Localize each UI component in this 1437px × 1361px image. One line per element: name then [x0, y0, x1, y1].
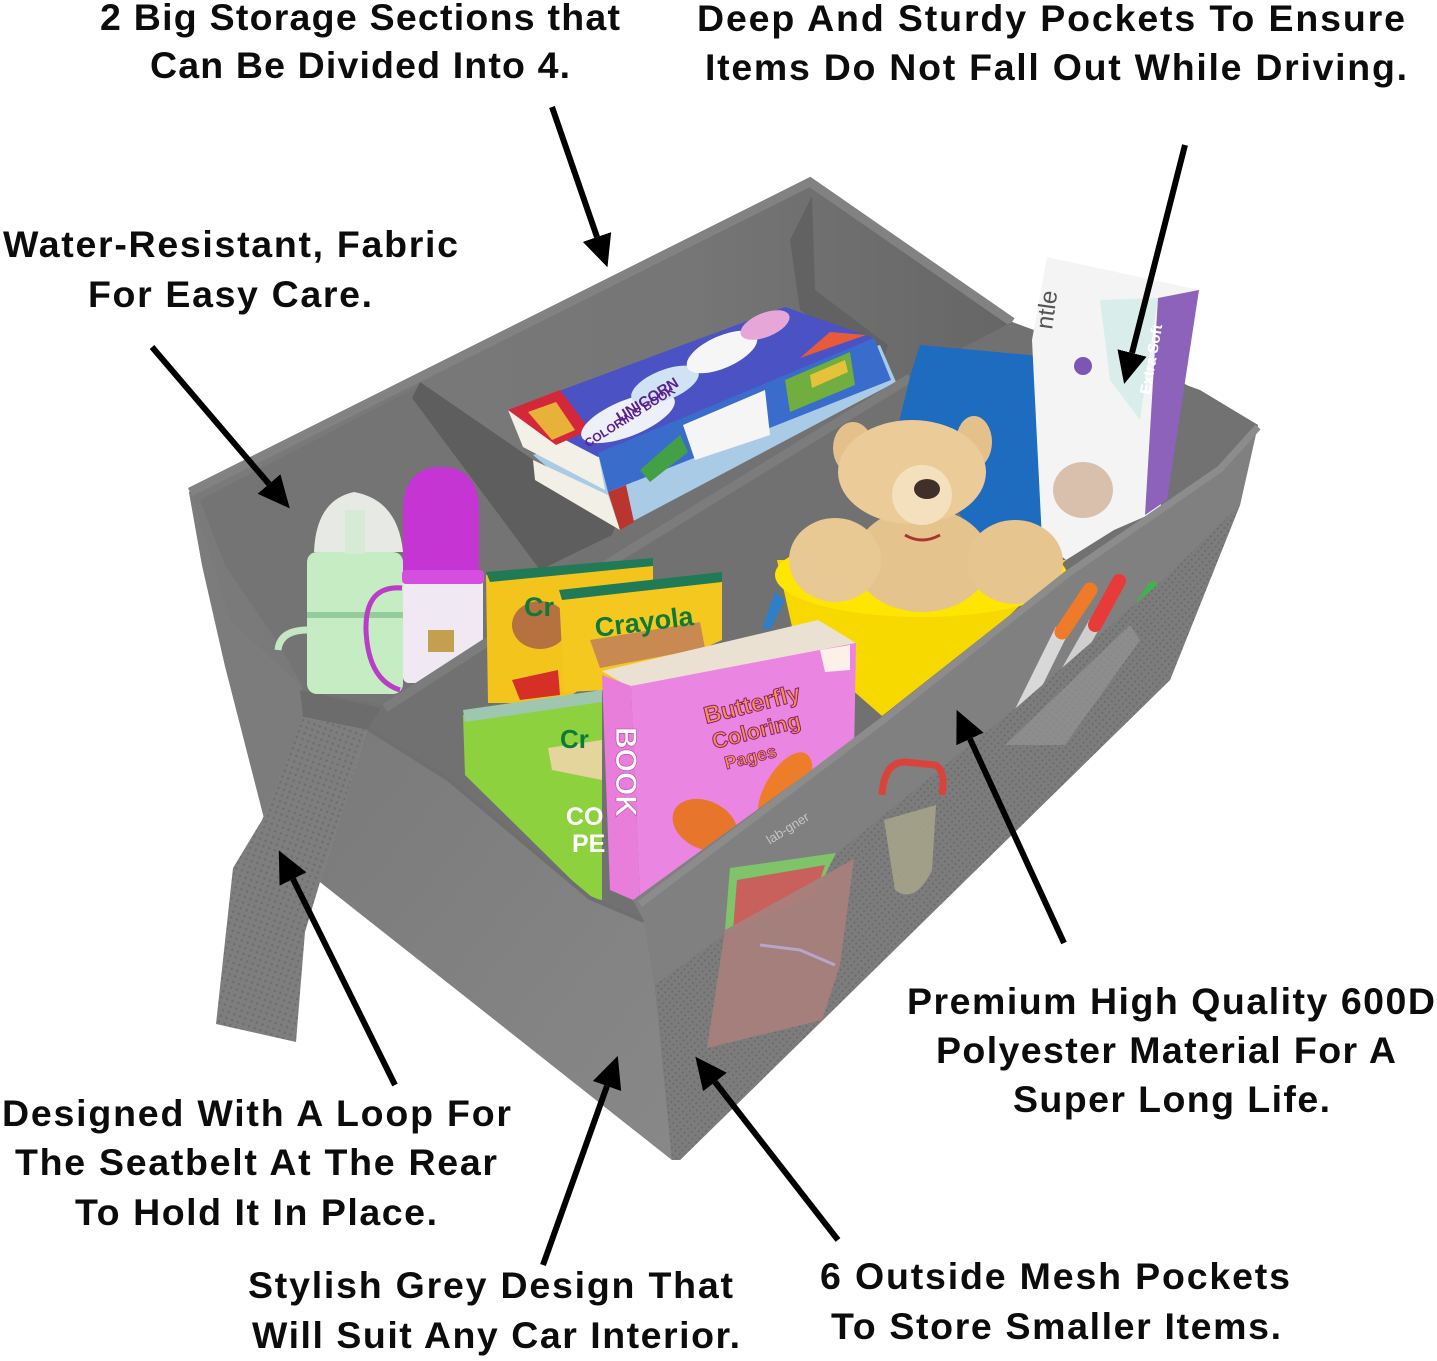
- white baby wipes pack: ntle: [1031, 289, 1063, 331]
- right rear interior wall: [1160, 370, 1258, 495]
- right compartment interior: [367, 322, 1258, 925]
- cross divider: [412, 382, 618, 570]
- arrow: grey design: [543, 1086, 607, 1265]
- text: seatbelt loop: Designed With A Loop For: [2, 1092, 511, 1134]
- butterfly coloring book: Butterfly: [701, 680, 804, 730]
- brand label: lab-gner: [763, 809, 812, 847]
- front end wall: [320, 730, 672, 1160]
- unicorn book stack: [508, 304, 896, 530]
- green crayon box: PE: [572, 830, 605, 858]
- text: mesh pockets: 6 Outside Mesh Pockets: [820, 1255, 1290, 1297]
- yellow crayon box: Cr: [524, 592, 554, 622]
- text: polyester material: Polyester Material For A: [936, 1029, 1396, 1071]
- rim edge highlight: [640, 427, 1258, 904]
- text: storage sections: Can Be Divided Into 4.: [150, 44, 570, 86]
- yellow bucket: [762, 533, 1067, 716]
- teddy bear: [789, 416, 1063, 612]
- mesh pockets panel: [655, 505, 1240, 1160]
- pink baby bottle: [366, 467, 484, 690]
- text: polyester material: Super Long Life.: [1013, 1078, 1330, 1120]
- text: seatbelt loop: The Seatbelt At The Rear: [15, 1141, 497, 1183]
- arrow: polyester material: [970, 739, 1064, 943]
- pencil holder pocket overlay: [1005, 625, 1140, 745]
- yellow crayon box: [486, 558, 653, 703]
- outer left wall: [189, 492, 305, 822]
- organizer product illustration: [189, 180, 1258, 1160]
- right side rim band: [633, 425, 1258, 985]
- text: polyester material: Premium High Quality 600D: [907, 980, 1435, 1022]
- green crayon box: CO: [566, 803, 604, 831]
- seatbelt loop strap: [216, 717, 367, 1042]
- text: mesh pockets: To Store Smaller Items.: [831, 1305, 1281, 1347]
- text: grey design: Will Suit Any Car Interior.: [252, 1314, 740, 1356]
- butterfly coloring book: Coloring: [709, 708, 803, 754]
- left chamber: [200, 388, 612, 705]
- central divider rim: [385, 378, 910, 708]
- butterfly coloring book: [602, 620, 856, 900]
- green sippy bottle: [278, 492, 403, 694]
- map in mesh pocket: [707, 853, 854, 1048]
- text: deep pockets: [697, 0, 1407, 88]
- colored markers: [1020, 581, 1153, 720]
- text: seatbelt loop: To Hold It In Place.: [75, 1191, 437, 1233]
- text: water resistant: Water-Resistant, Fabric: [3, 223, 458, 265]
- text: water resistant: [3, 223, 458, 315]
- left chamber front rim: [300, 690, 381, 730]
- toy in mesh pocket: [882, 762, 943, 894]
- base silhouette: [189, 180, 1258, 1160]
- butterfly coloring book: BOOK: [609, 727, 642, 817]
- arrow: seatbelt loop: [293, 879, 395, 1085]
- green crayon box: [463, 690, 605, 900]
- front wall rim: [367, 728, 644, 921]
- butterfly coloring book: Pages: [722, 741, 779, 773]
- rear wall: [190, 180, 1012, 690]
- velcro strip: [790, 196, 888, 370]
- green crayon box: Cr: [560, 724, 589, 754]
- text: deep pockets: Items Do Not Fall Out While Driving.: [705, 46, 1407, 88]
- text: polyester material: [907, 980, 1435, 1120]
- rear wall rim: [190, 182, 1012, 492]
- arrow: water-resistant fabric: [152, 347, 269, 484]
- unicorn book stack: UNICORN: [613, 374, 682, 426]
- text: water resistant: For Easy Care.: [88, 273, 372, 315]
- text: grey design: Stylish Grey Design That: [248, 1264, 734, 1306]
- arrow: mesh pockets: [715, 1082, 838, 1240]
- arrow: storage sections: [552, 107, 597, 237]
- arrow: deep pockets: [1132, 145, 1185, 353]
- text: storage sections: [100, 0, 620, 86]
- text: seatbelt loop: [2, 1092, 511, 1233]
- white baby wipes pack: Extra Soft: [1137, 323, 1166, 396]
- unicorn book stack: COLORING BOOK: [582, 383, 678, 450]
- text: mesh pockets: [820, 1255, 1290, 1347]
- white baby wipes pack: [1031, 257, 1199, 560]
- blue wipes pack: [899, 345, 1051, 560]
- Crayola box: Crayola: [593, 601, 696, 643]
- Crayola box: [559, 572, 722, 692]
- text: grey design: [248, 1264, 740, 1356]
